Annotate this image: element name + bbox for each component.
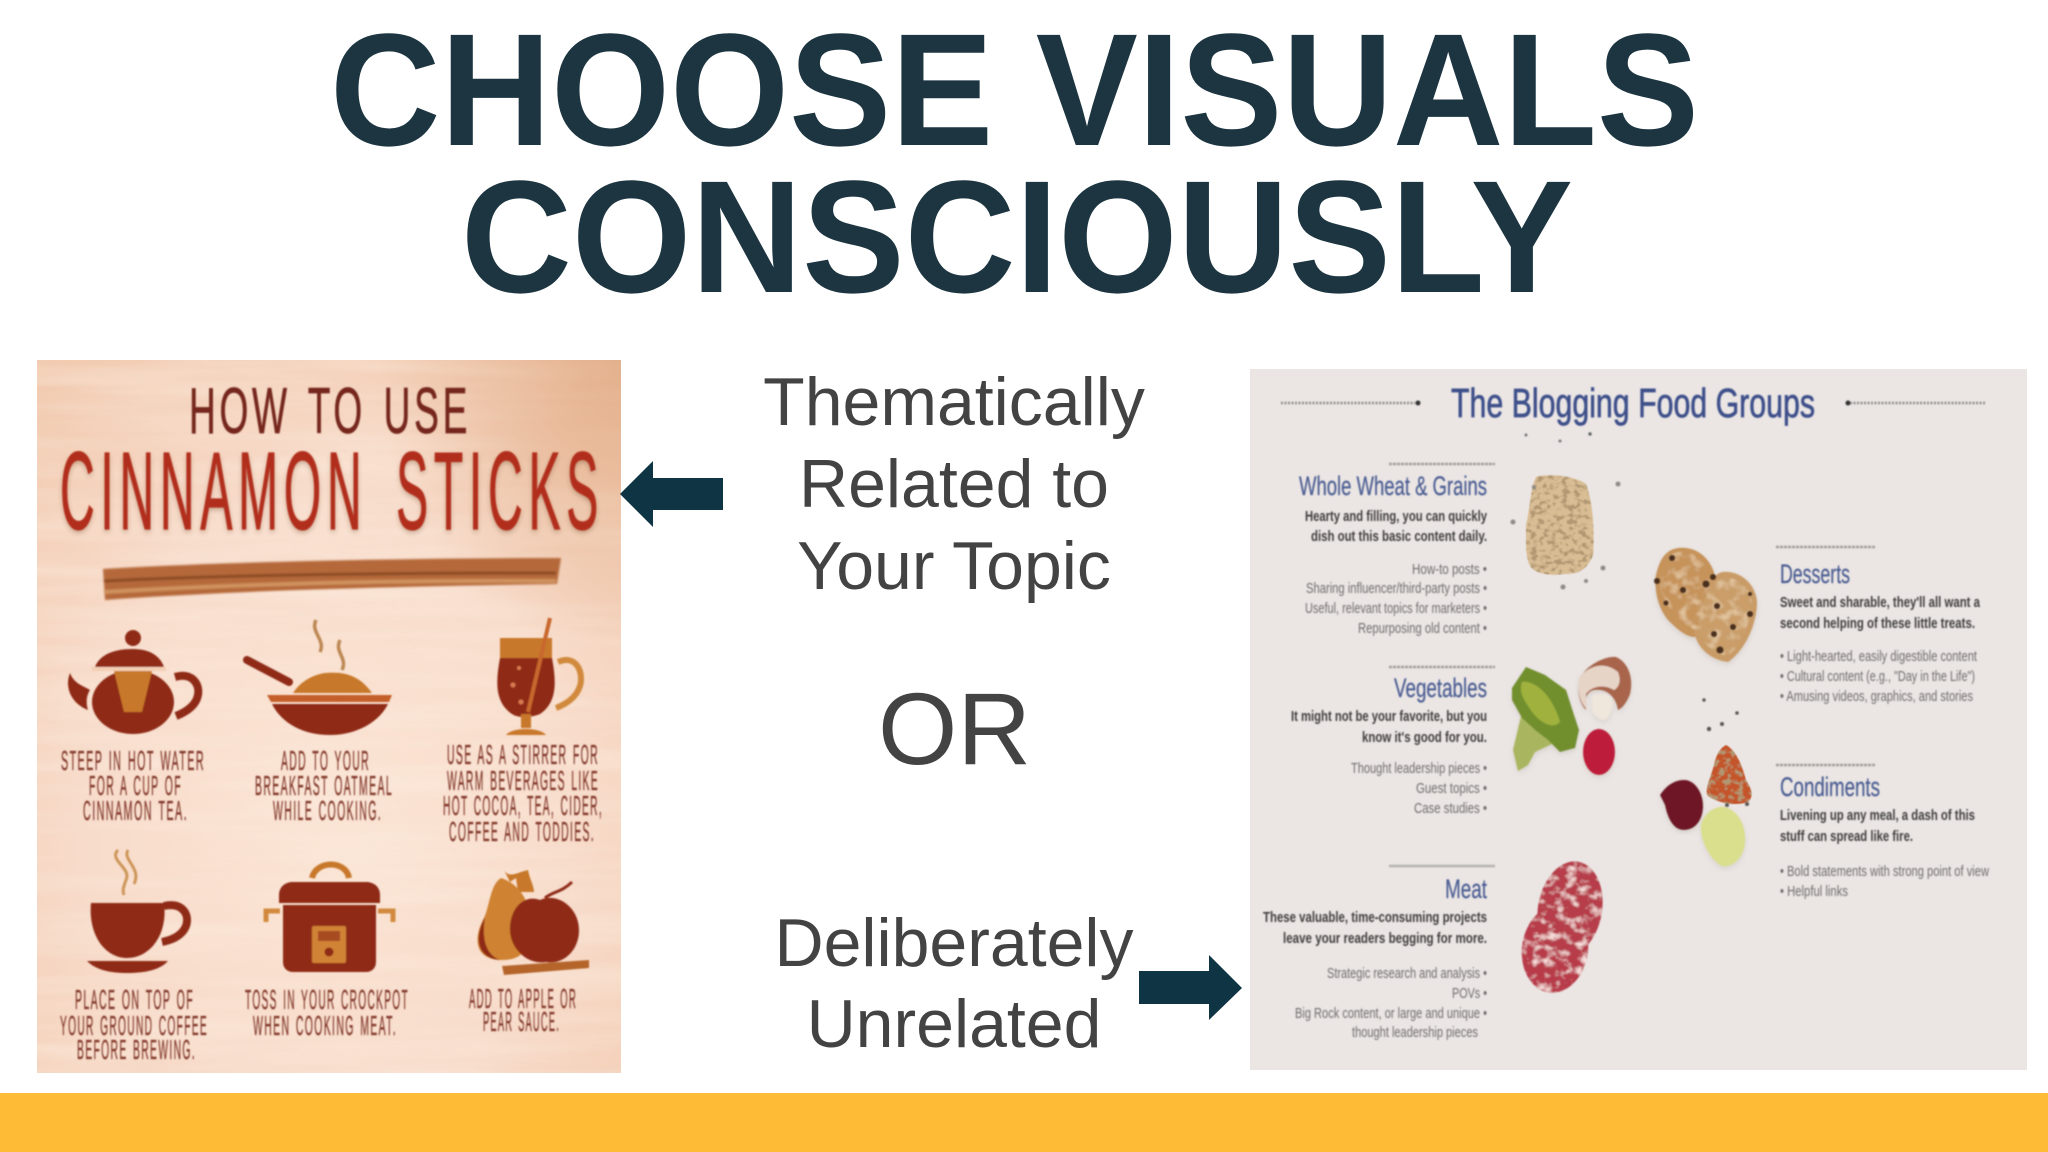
panel: how to use cinnamon sticks: STEEP IN HOT WATER xyxy=(61,745,205,776)
group: desserts: • Light-hearted, easily digestible content xyxy=(1780,649,1977,665)
title: CHOOSE VISUALS xyxy=(330,0,1699,179)
footer bar xyxy=(0,1093,2048,1152)
divider dots: title xyxy=(1281,400,1985,442)
text block: thematically related to your topic xyxy=(763,364,1145,604)
group: meat xyxy=(1263,866,1495,1041)
group: vegetables: It might not be your favorite, but you xyxy=(1291,708,1487,725)
image: spices xyxy=(1660,698,1752,866)
panel: how to use cinnamon sticks: PEAR SAUCE. xyxy=(483,1006,560,1037)
panel: how to use cinnamon sticks: CINNAMON TEA. xyxy=(83,795,188,826)
panel: the blogging food groups xyxy=(1250,369,2027,1070)
panel: how to use cinnamon sticks: WHILE COOKING. xyxy=(273,795,382,826)
text: CINNAMON STICKS xyxy=(60,433,604,556)
caption: add to apple or pear sauce xyxy=(469,983,577,1037)
panel: how to use cinnamon sticks: PLACE ON TOP OF xyxy=(75,984,194,1015)
panel: how to use cinnamon sticks xyxy=(37,360,621,1073)
image: broccoli, mushroom and radish xyxy=(1512,657,1631,775)
panel: how to use cinnamon sticks: BEFORE BREWING. xyxy=(77,1034,196,1065)
heading: how to use: HOW TO USE xyxy=(189,374,471,447)
text block: deliberately unrelated: Deliberately xyxy=(774,905,1134,981)
caption: place on top of ground coffee xyxy=(60,984,208,1065)
caption: add to breakfast oatmeal xyxy=(255,745,393,826)
title xyxy=(330,0,1699,326)
group: condiments: • Helpful links xyxy=(1780,884,1848,900)
group: vegetables xyxy=(1291,667,1495,817)
group: whole wheat and grains: Hearty and filling, you can quickly xyxy=(1305,508,1487,525)
caption: steep in hot water xyxy=(61,745,205,826)
text: or: OR xyxy=(878,672,1031,786)
caption: toss in crockpot xyxy=(245,984,409,1041)
panel: how to use cinnamon sticks: FOR A CUP OF xyxy=(89,770,182,801)
text: WARM BEVERAGES LIKE xyxy=(447,765,599,796)
group: whole wheat and grains: Repurposing old content • xyxy=(1358,621,1487,637)
icon: pear and apple xyxy=(478,868,589,975)
icon: mulled drink glass xyxy=(497,618,581,735)
text block: deliberately unrelated: Unrelated xyxy=(807,986,1101,1062)
panel: how to use cinnamon sticks: YOUR GROUND COFFEE xyxy=(60,1010,208,1041)
icon: coffee cup xyxy=(87,850,187,973)
group: whole wheat and grains: How-to posts • xyxy=(1412,562,1487,578)
group: whole wheat and grains: Sharing influencer/third-party posts • xyxy=(1306,581,1487,597)
group: condiments: stuff can spread like fire. xyxy=(1780,828,1913,845)
group: whole wheat and grains: Whole Wheat & Grains xyxy=(1299,471,1487,501)
heading: cinnamon sticks xyxy=(60,430,604,556)
group: vegetables: Case studies • xyxy=(1414,801,1487,817)
group: condiments: • Bold statements with strong point of view xyxy=(1780,864,1989,880)
group: vegetables: Guest topics • xyxy=(1416,781,1487,797)
title: CONSCIOUSLY xyxy=(461,147,1573,326)
text: CINNAMON STICKS xyxy=(60,430,604,553)
arrow: pointing right to blogging panel xyxy=(1139,955,1242,1020)
image: cinnamon stick xyxy=(103,558,561,600)
icon: teapot xyxy=(68,630,198,734)
group: vegetables: know it's good for you. xyxy=(1362,729,1487,746)
group: desserts: second helping of these little treats. xyxy=(1780,615,1975,632)
group: desserts: Desserts xyxy=(1780,559,1850,589)
text block: thematically related to your topic: Your Topic xyxy=(797,528,1111,604)
text: ADD TO APPLE OR xyxy=(469,983,577,1014)
group: vegetables: Thought leadership pieces • xyxy=(1351,761,1487,777)
caption: use as a stirrer xyxy=(443,739,603,847)
text: COFFEE AND TODDIES. xyxy=(449,816,595,847)
arrow: pointing left to cinnamon panel xyxy=(620,461,723,527)
group: desserts xyxy=(1776,547,1980,705)
panel: how to use cinnamon sticks: BREAKFAST OATMEAL xyxy=(255,770,393,801)
image: salami slices xyxy=(1516,856,1610,997)
group: condiments: Condiments xyxy=(1780,772,1880,802)
group: whole wheat and grains: Useful, relevant topics for marketers • xyxy=(1305,601,1487,617)
text block: thematically related to your topic: Thematically xyxy=(763,364,1145,440)
text block: thematically related to your topic: Related to xyxy=(799,446,1109,522)
panel: how to use cinnamon sticks: WHEN COOKING MEAT. xyxy=(253,1010,397,1041)
group: meat: POVs • xyxy=(1452,986,1487,1002)
text: HOT COCOA, TEA, CIDER, xyxy=(443,790,603,821)
group: condiments: Livening up any meal, a dash of this xyxy=(1780,807,1975,824)
group: condiments xyxy=(1776,765,1989,900)
group: meat: Meat xyxy=(1445,874,1487,904)
panel: how to use cinnamon sticks: TOSS IN YOUR CROCKPOT xyxy=(245,984,409,1015)
text: USE AS A STIRRER FOR xyxy=(447,739,599,770)
group: desserts: • Amusing videos, graphics, and stories xyxy=(1780,689,1973,705)
heading: the blogging food groups: The Blogging Food Groups xyxy=(1451,380,1815,426)
group: desserts: Sweet and sharable, they'll all want a xyxy=(1780,594,1980,611)
group: meat: leave your readers begging for more. xyxy=(1283,930,1487,947)
group: meat: Strategic research and analysis • xyxy=(1327,966,1487,982)
group: meat: Big Rock content, or large and unique • xyxy=(1295,1006,1487,1022)
image: pasta grains xyxy=(1510,475,1620,590)
group: meat: These valuable, time-consuming projects xyxy=(1263,909,1487,926)
text block: deliberately unrelated xyxy=(774,905,1134,1062)
icon: oatmeal bowl xyxy=(247,620,392,735)
group: whole wheat and grains: dish out this basic content daily. xyxy=(1311,528,1487,545)
group: vegetables: Vegetables xyxy=(1394,673,1487,703)
group: meat: thought leadership pieces xyxy=(1352,1025,1478,1041)
group: desserts: • Cultural content (e.g., "Day in the Life") xyxy=(1780,669,1975,685)
image: cookies xyxy=(1654,548,1757,662)
group: whole wheat and grains xyxy=(1299,464,1495,637)
icon: crockpot xyxy=(266,864,393,972)
panel: how to use cinnamon sticks: ADD TO YOUR xyxy=(281,745,370,776)
